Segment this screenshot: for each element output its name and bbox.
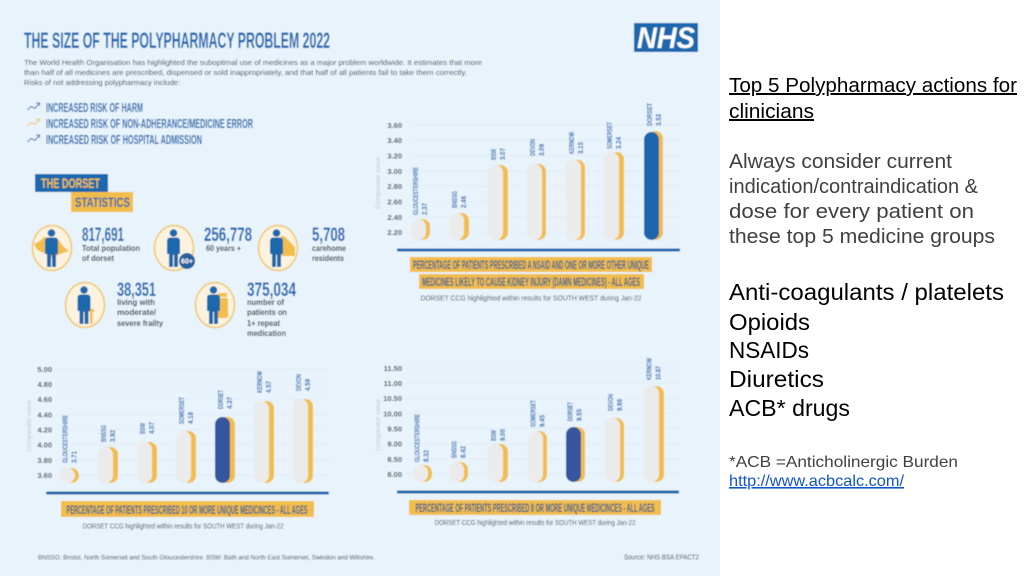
stat: repeat medication: medication: [247, 329, 286, 338]
bar: Kernow: [254, 371, 274, 483]
bar: Kernow: [566, 132, 585, 240]
chart caption: [61, 501, 314, 530]
bar: Gloucestershire: 8.32: [424, 450, 430, 462]
chart caption: DORSET CCG highlighted within results for SOUTH WEST during Jan-22: [420, 296, 642, 302]
bar: Devon: DEVON: [296, 374, 303, 391]
bar: Devon: DEVON: [608, 394, 615, 411]
bar: BSW: [488, 429, 508, 482]
stat: total population: 817,691: [82, 225, 124, 246]
stat: repeat medication: patients on: [247, 308, 287, 317]
bar: Somerset: SOMERSET: [179, 397, 186, 424]
y axis: 3.60: [37, 471, 52, 480]
ACB footnote: http://www.acbcalc.com/: [729, 473, 905, 490]
bar: BSW: BSW: [491, 149, 498, 160]
guidance text: dose for every patient on: [729, 201, 974, 223]
y axis: 2.80: [387, 182, 402, 191]
y axis: 3.00: [387, 167, 402, 176]
y axis: [375, 364, 680, 479]
medicine groups: NSAIDs: [729, 337, 809, 363]
bar: Somerset: [528, 400, 547, 482]
stat: frailty: [66, 280, 164, 328]
chart caption: MEDICINES LIKELY TO CAUSE KIDNEY INJURY (DAMN MEDICINES) - ALL AGES: [422, 275, 640, 289]
bar: Dorset: [215, 390, 235, 483]
bar: Somerset: [604, 122, 624, 240]
bar: BNSSG: 3.92: [110, 430, 117, 442]
chart caption: [410, 257, 652, 302]
bar: Devon: 3.09: [539, 144, 546, 156]
bar: Gloucestershire: 3.71: [72, 451, 78, 463]
intro text: Risks of not addressing polypharmacy include:: [24, 78, 180, 87]
bar: Dorset: [566, 402, 585, 482]
bar: Kernow: KERNOW: [646, 358, 654, 380]
y axis: 2.60: [387, 198, 402, 206]
bar: BNSSG: BNSSG: [452, 441, 458, 458]
stat: 60 years plus: 60 years +: [206, 244, 241, 253]
bar: BSW: 3.07: [500, 148, 507, 160]
bar: Dorset: DORSET: [647, 102, 654, 126]
bar: BSW: BSW: [491, 430, 498, 441]
medicine groups: ACB* drugs: [729, 395, 850, 421]
guidance text: [729, 151, 995, 248]
risk: hospital admission: INCREASED RISK OF HOSPITAL ADMISSION: [46, 132, 202, 147]
bar: Somerset: 4.18: [188, 412, 195, 424]
bar: Devon: DEVON: [530, 139, 537, 156]
bar: Gloucestershire: GLOUCESTERSHIRE: [414, 414, 422, 462]
stat: carehome residents: 5,708: [312, 225, 345, 246]
bar: Kernow: KERNOW: [257, 371, 264, 393]
panel: clinician actions: [729, 75, 1017, 490]
intro text: than half of all medicines are prescribed, dispensed or sold inappropriately, and that half of all patients fail to take them correctly.: [24, 68, 467, 77]
heading: [729, 75, 1017, 123]
icon: trend error: [28, 119, 40, 126]
stat: frailty: moderate/: [117, 308, 157, 317]
bar: Somerset: SOMERSET: [607, 122, 614, 149]
chart: 8 or more medicines: PERCENTAGE OF PATIENTS PRESCRIBED 8 OR MORE UNIQUE MEDICINCES - ALL AGES: [416, 501, 654, 515]
chart caption: [409, 500, 661, 527]
y axis: 3.40: [387, 136, 402, 145]
NHS logo: NHS: [637, 22, 695, 55]
medicine groups: Opioids: [729, 309, 810, 335]
bar: Gloucestershire: [60, 415, 79, 483]
chart caption: DORSET CCG highlighted within results for SOUTH WEST during Jan-22: [82, 524, 284, 530]
bar: Kernow: [644, 358, 664, 482]
risk list: [28, 100, 253, 147]
y axis: 9.50: [387, 424, 402, 434]
stat: frailty: living with: [117, 298, 155, 307]
chart: NSAID kidney injury: PERCENTAGE OF PATIENTS PRESCRIBED A NSAID AND ONE OR MORE OTHER UNIQUE: [413, 258, 649, 272]
bar: Gloucestershire: [413, 414, 432, 482]
source: Source: NHS BSA EPACT2: [624, 554, 699, 562]
bar: BSW: [137, 422, 157, 483]
bar: Dorset: 4.37: [227, 397, 234, 409]
y axis: Comparator value: [375, 399, 382, 451]
stat: carehome residents: residents: [312, 254, 344, 263]
heading: the Dorset statistics: THE DORSET: [41, 175, 100, 191]
bar: BNSSG: [449, 441, 468, 482]
bar: Somerset: [176, 397, 196, 483]
risk: harm: INCREASED RISK OF HARM: [46, 100, 143, 115]
y axis: 2.40: [387, 213, 402, 222]
stat: total population: Total population: [82, 244, 140, 253]
footnote: BNSSG: Bristol, North Somerset and South Gloucestershire. BSW: Bath and North East Somerset, Swindon and Wiltshire.: [38, 554, 375, 562]
y axis: [375, 121, 680, 237]
bar: Dorset: 3.53: [656, 114, 663, 126]
medicine groups: Diuretics: [729, 366, 824, 392]
bar: Devon: 4.59: [305, 379, 312, 391]
bar: Gloucestershire: GLOUCESTERSHIRE: [413, 167, 420, 215]
y axis: 4.20: [37, 426, 52, 434]
y axis: 4.80: [37, 380, 52, 389]
bar: Somerset: SOMERSET: [530, 400, 538, 427]
stat: repeat medication: 1+ repeat: [247, 319, 280, 328]
stat: repeat medication: number of: [247, 298, 284, 307]
guidance text: indication/contraindication &: [729, 176, 979, 198]
y axis: 8.00: [387, 470, 402, 479]
bar: Kernow: 10.87: [656, 366, 662, 380]
stat: total population: of dorset: [82, 254, 114, 263]
title: THE SIZE OF THE POLYPHARMACY PROBLEM 2022: [24, 28, 330, 53]
intro text: The World Health Organisation has highlighted the suboptimal use of medicines as a major problem worldwide. It estimates that more: [24, 58, 482, 67]
bar: Gloucestershire: 2.37: [422, 203, 429, 215]
bar: BSW: 9.00: [500, 429, 507, 441]
y axis: 5.00: [37, 365, 52, 374]
bar: Somerset: 3.24: [616, 137, 623, 149]
bar: Dorset: DORSET: [218, 390, 225, 409]
medicine groups: Anti-coagulants / platelets: [729, 279, 1004, 305]
icon: trend admission: [28, 135, 40, 142]
bar: Kernow: KERNOW: [569, 132, 576, 154]
y axis: 11.00: [384, 379, 402, 388]
stat: frailty: severe frailty: [117, 319, 164, 328]
y axis: 11.50: [384, 364, 402, 373]
y axis: 3.20: [387, 152, 402, 160]
y axis: 4.00: [37, 440, 52, 450]
heading: clinicians: [729, 101, 814, 123]
heading: the Dorset statistics: STATISTICS: [75, 194, 130, 210]
ACB footnote: [729, 454, 958, 490]
bar: BNSSG: 8.42: [460, 446, 468, 458]
bar: BNSSG: BNSSG: [452, 191, 459, 208]
chart caption: DORSET CCG highlighted within results for SOUTH WEST during Jan-22: [434, 520, 636, 527]
y axis: Comparator value: [26, 400, 33, 452]
chart: NSAID kidney injury: [375, 102, 680, 302]
bar: Devon: [293, 374, 313, 483]
chart: 10 or more medicines: PERCENTAGE OF PATIENTS PRESCRIBED 10 OR MORE UNIQUE MEDICINCES - ALL AGES: [66, 503, 308, 517]
bar: BSW: BSW: [140, 423, 147, 434]
y axis: 3.80: [37, 456, 52, 465]
risk: non-adherence: INCREASED RISK OF NON-ADHERANCE/MEDICINE ERROR: [46, 116, 253, 131]
y axis: 4.40: [37, 410, 52, 420]
bar: Kernow: 4.57: [266, 381, 273, 393]
bar: Kernow: 3.15: [578, 142, 585, 154]
y axis: 8.50: [387, 455, 402, 464]
bar: Dorset: DORSET: [568, 402, 574, 421]
stat: repeat medication: [196, 280, 296, 338]
bar: BSW: [488, 148, 508, 240]
icon: trend harm: [28, 103, 40, 110]
guidance text: these top 5 medicine groups: [729, 226, 995, 248]
stat: carehome residents: [258, 225, 346, 270]
bar: Gloucestershire: [411, 167, 430, 240]
guidance text: Always consider current: [729, 151, 952, 173]
stat: total population: [32, 225, 140, 270]
bar: Devon: [527, 139, 546, 240]
heading: the Dorset statistics: [35, 174, 133, 212]
stat: 60 years plus: [154, 225, 252, 270]
stat: 60 years plus: 256,778: [204, 225, 252, 246]
bar: Devon: 9.86: [617, 399, 624, 411]
bar: Dorset: [644, 102, 663, 240]
bar: Devon: [605, 394, 624, 482]
stat: repeat medication: 375,034: [247, 280, 296, 301]
bar: BNSSG: BNSSG: [101, 425, 108, 442]
stat: frailty: 38,351: [117, 280, 156, 301]
y axis: 3.60: [387, 121, 402, 130]
y axis: 4.60: [37, 395, 52, 404]
y axis: [26, 365, 330, 480]
bar: BNSSG: [98, 425, 118, 483]
stat: carehome residents: carehome: [312, 244, 346, 253]
intro text: [24, 58, 482, 87]
bar: BSW: 4.07: [149, 422, 156, 434]
bar: Somerset: 9.45: [540, 415, 546, 427]
heading: Top 5 Polypharmacy actions for: [729, 75, 1017, 97]
bar: BNSSG: [449, 191, 469, 240]
y axis: 10.00: [383, 410, 402, 418]
y axis: 9.00: [387, 440, 402, 448]
bar: Dorset: 9.55: [576, 409, 584, 421]
ACB footnote: *ACB =Anticholinergic Burden: [729, 454, 958, 471]
panel: infographic: [0, 0, 720, 576]
chart: 8 or more medicines: [375, 358, 680, 527]
y axis: 2.20: [387, 228, 402, 237]
bar: BNSSG: 2.46: [461, 196, 468, 208]
chart: 10 or more medicines: [26, 365, 330, 530]
y axis: Comparator value: [375, 157, 382, 209]
y axis: 10.50: [383, 394, 402, 403]
bar: Gloucestershire: GLOUCESTERSHIRE: [62, 415, 70, 463]
medicine groups: [729, 279, 1004, 421]
stat: 60 years plus: 60+: [181, 258, 193, 266]
